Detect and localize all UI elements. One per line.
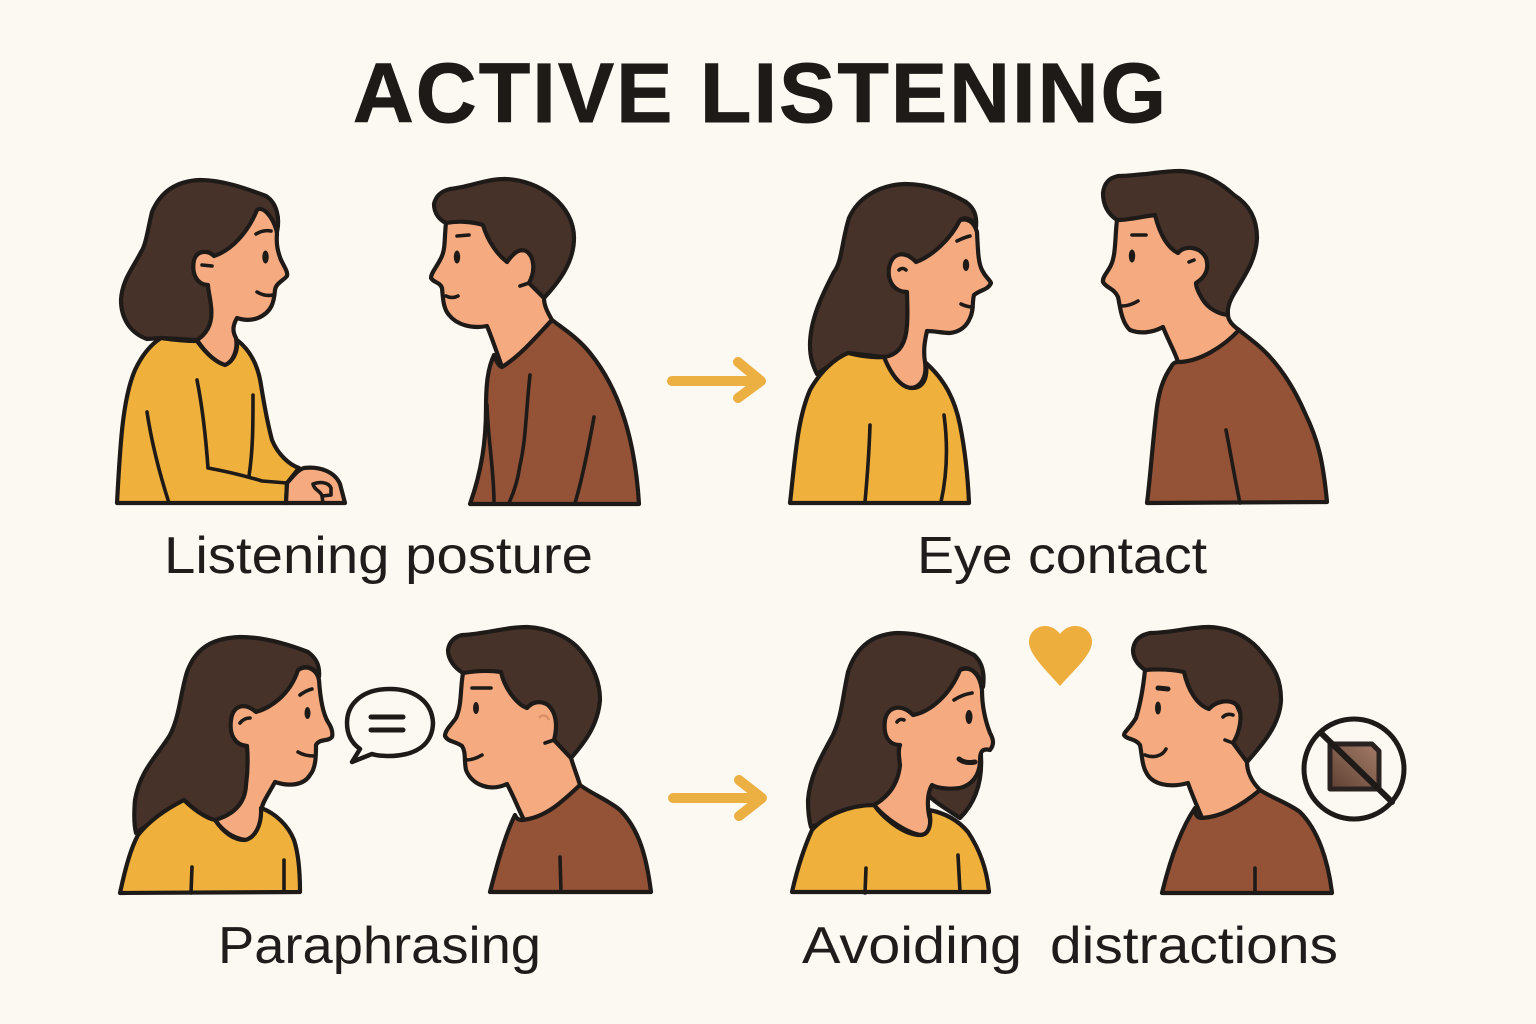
- label: avoiding distractions: distractions: [1050, 917, 1338, 975]
- icon: crossed-out phone: [1304, 719, 1404, 819]
- figure: woman smiling: [792, 633, 993, 893]
- panel: listening posture: [117, 179, 639, 504]
- label: avoiding distractions: [802, 917, 1338, 975]
- figure: man facing left: [1103, 171, 1327, 503]
- label: listening posture: Listening posture: [164, 527, 593, 585]
- icon: speech bubble with equals lines: [347, 689, 433, 762]
- figure: woman facing right: [790, 184, 991, 503]
- panel: avoiding distractions: [792, 626, 1404, 893]
- figure: woman in yellow sweater with clasped hands: [117, 180, 345, 503]
- arrow: bottom row: [673, 780, 762, 816]
- figure: man in brown shirt leaning forward: [431, 179, 639, 504]
- label: paraphrasing: Paraphrasing: [218, 917, 541, 975]
- icon: heart: [1029, 626, 1092, 686]
- arrow: top row: [672, 362, 761, 398]
- label: eye contact: Eye contact: [917, 527, 1208, 585]
- label: avoiding distractions: Avoiding: [802, 917, 1022, 975]
- figure: man listening: [445, 627, 651, 892]
- panel: eye contact: [790, 171, 1327, 503]
- title: ACTIVE LISTENING: [353, 46, 1166, 140]
- panel: paraphrasing: [120, 627, 651, 893]
- figure: man smiling: [1124, 627, 1332, 893]
- figure: woman speaking: [120, 637, 332, 893]
